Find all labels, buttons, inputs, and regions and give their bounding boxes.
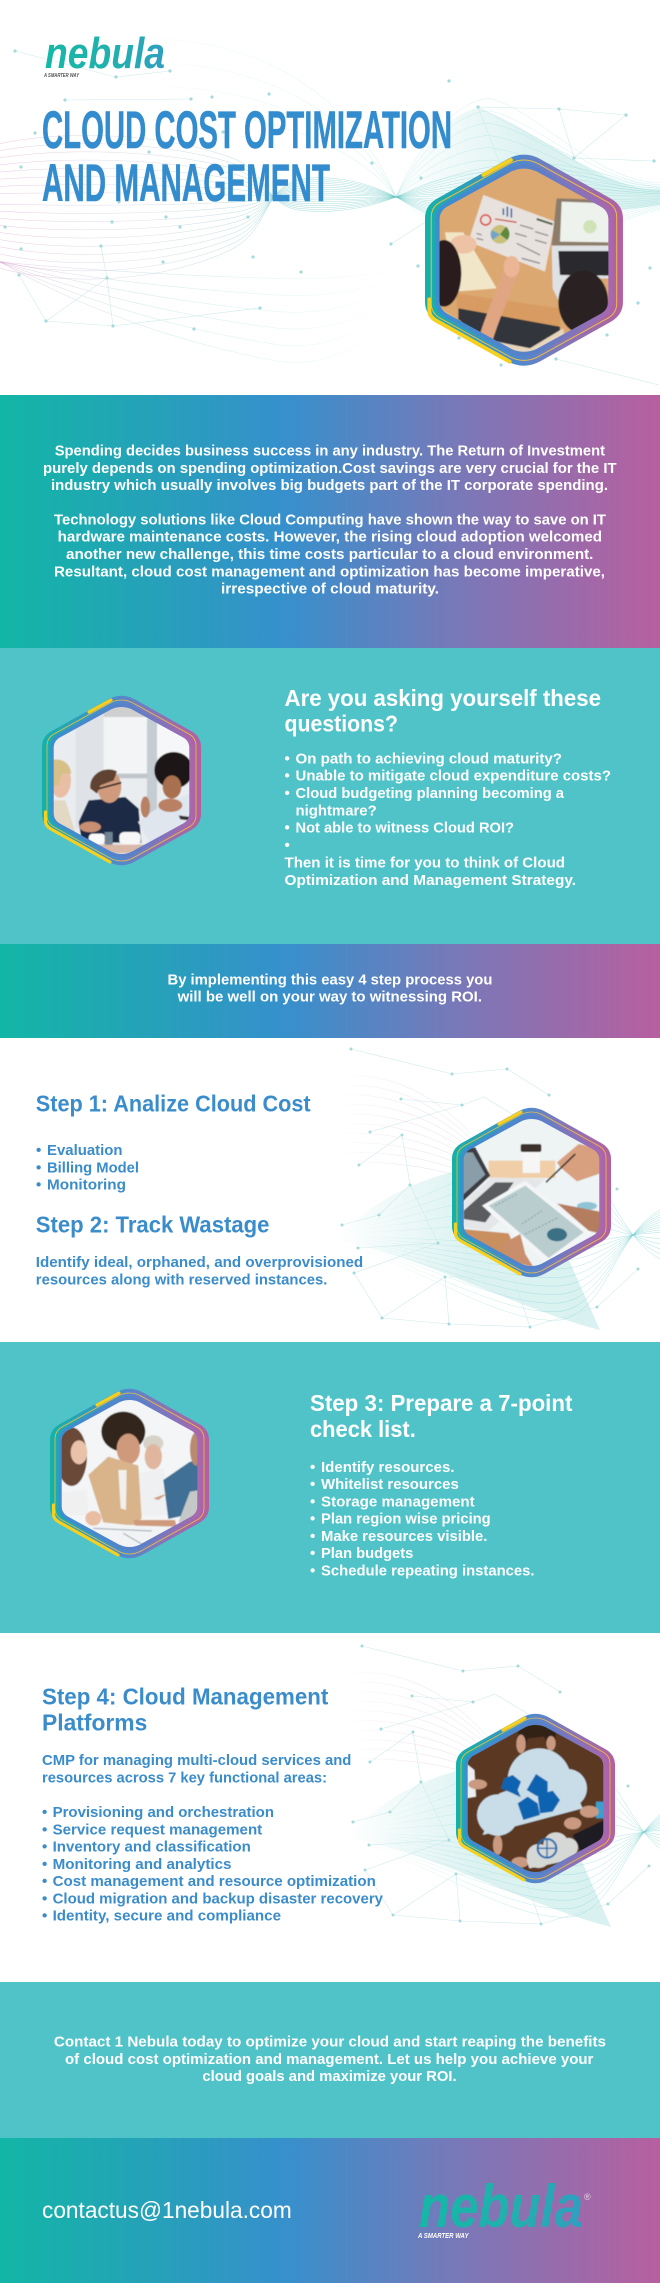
intro paragraph 2: Technology solutions like Cloud Computing have shown the way to save on IT — [54, 511, 606, 528]
functional areas list: • — [42, 1908, 47, 1925]
heading: step 1: Step 1: Analize Cloud Cost — [36, 1091, 311, 1117]
question list: Unable to mitigate cloud expenditure costs? — [296, 768, 611, 785]
functional areas list: Provisioning and orchestration — [53, 1804, 274, 1821]
functional areas list: • — [42, 1873, 47, 1890]
question list: • — [284, 750, 290, 767]
question list: • — [284, 837, 290, 854]
step 3 check list: • — [310, 1528, 315, 1545]
functional areas list: Monitoring and analytics — [53, 1856, 231, 1873]
question list: nightmare? — [296, 803, 377, 820]
panel: intro gradient band — [0, 395, 660, 648]
question list — [284, 750, 611, 854]
heading: are you asking — [284, 685, 601, 737]
step 1 list — [36, 1142, 139, 1194]
logo: nebula: A SMARTER WAY — [43, 73, 80, 79]
panel: four step banner: By implementing this easy 4 step process you — [168, 971, 492, 988]
intro paragraph 2: hardware maintenance costs. However, the rising cloud adoption welcomed — [58, 529, 602, 546]
logo: nebula: nebula — [45, 29, 165, 78]
heading: are you asking: questions? — [284, 711, 398, 737]
step 3 check list: • — [310, 1493, 315, 1510]
heading: step 2: Step 2: Track Wastage — [36, 1211, 269, 1237]
hexagon photo: meeting of three people — [42, 696, 201, 866]
panel: contact call to action: of cloud cost optimization and management. Let us help you achieve your — [65, 2051, 594, 2068]
CMP description: resources across 7 key functional areas: — [42, 1769, 327, 1786]
step 3 check list: Plan region wise pricing — [321, 1511, 491, 1528]
step 1 list: • — [36, 1142, 41, 1159]
heading: step 4: Step 4: Cloud Management — [42, 1683, 329, 1709]
panel: hero — [0, 29, 660, 385]
functional areas list: • — [42, 1856, 47, 1873]
hexagon photo: tablet and laptop — [452, 1108, 611, 1278]
footer logo: nebula — [419, 2173, 583, 2240]
then-it-is-time text: Then it is time for you to think of Cloud — [284, 854, 565, 871]
wave and network background — [330, 1048, 660, 1330]
heading: step 4 — [42, 1683, 329, 1735]
step 1 list: Monitoring — [47, 1177, 126, 1194]
step 2 description — [36, 1254, 363, 1288]
step 1 list: • — [36, 1159, 41, 1176]
step 3 check list: • — [310, 1545, 315, 1562]
panel: contact call to action — [0, 1982, 660, 2138]
hexagon photo: cloud and puzzle — [456, 1714, 615, 1884]
panel: steps 1 and 2 — [36, 1048, 660, 1330]
step 3 check list: Make resources visible. — [321, 1528, 487, 1545]
panel: contact call to action: cloud goals and maximize your ROI. — [202, 2068, 457, 2085]
step 3 check list — [310, 1459, 534, 1579]
functional areas list: • — [42, 1804, 47, 1821]
step 3 check list: • — [310, 1459, 315, 1476]
heading: step 3: check list. — [310, 1416, 416, 1442]
hero wave and network background — [0, 39, 660, 385]
functional areas list: • — [42, 1890, 47, 1907]
step 3 check list: Plan budgets — [321, 1545, 413, 1562]
step 2 description: resources along with reserved instances. — [36, 1271, 327, 1288]
panel: step 4 — [42, 1644, 660, 1927]
intro paragraph 2: irrespective of cloud maturity. — [221, 580, 439, 597]
then-it-is-time text: Optimization and Management Strategy. — [284, 872, 576, 889]
question list: • — [284, 785, 290, 802]
wave and network background — [341, 1644, 660, 1927]
step 3 check list: Schedule repeating instances. — [321, 1562, 534, 1579]
panel: footer — [0, 2138, 660, 2283]
step 3 check list: • — [310, 1511, 315, 1528]
step 1 list: Evaluation — [47, 1142, 122, 1159]
heading: are you asking: Are you asking yourself these — [284, 685, 601, 711]
step 3 check list: Whitelist resources — [321, 1476, 459, 1493]
step 3 check list: Storage management — [321, 1493, 475, 1510]
step 1 list: Billing Model — [47, 1159, 139, 1176]
question list: Cloud budgeting planning becoming a — [296, 785, 565, 802]
hexagon photo: team at laptop — [50, 1388, 209, 1558]
intro paragraph 1: purely depends on spending optimization.Cost savings are very crucial for the IT — [43, 460, 617, 477]
question list: • — [284, 820, 290, 837]
functional areas list — [42, 1804, 384, 1925]
functional areas list: Identity, secure and compliance — [53, 1908, 281, 1925]
functional areas list: Cost management and resource optimization — [53, 1873, 376, 1890]
panel: four step banner — [0, 944, 660, 1038]
hexagon photo: team reviewing charts — [425, 154, 623, 366]
intro paragraph 2 — [54, 511, 606, 597]
question list: • — [284, 768, 290, 785]
functional areas list: Cloud migration and backup disaster recovery — [53, 1890, 384, 1907]
step 1 list: • — [36, 1177, 41, 1194]
heading: step 4: Platforms — [42, 1709, 147, 1735]
contact email: contactus@1nebula.com — [42, 2197, 292, 2223]
question list: On path to achieving cloud maturity? — [296, 750, 562, 767]
title — [42, 101, 452, 213]
panel: contact call to action: Contact 1 Nebula today to optimize your cloud and start reaping the benefits — [54, 2034, 606, 2051]
panel: step 3 — [0, 1342, 660, 1633]
footer logo: A SMARTER WAY — [417, 2233, 470, 2240]
question list: Not able to witness Cloud ROI? — [296, 820, 514, 837]
intro paragraph 2: Resultant, cloud cost management and optimization has become imperative, — [54, 563, 605, 580]
footer logo: ® — [584, 2192, 591, 2202]
intro paragraph 1: industry which usually involves big budgets part of the IT corporate spending. — [51, 477, 608, 494]
intro paragraph 1: Spending decides business success in any industry. The Return of Investment — [55, 443, 605, 460]
panel: four step banner: will be well on your way to witnessing ROI. — [177, 989, 482, 1006]
CMP description — [42, 1752, 351, 1786]
then-it-is-time text — [284, 854, 576, 889]
intro paragraph 1 — [43, 443, 617, 494]
heading: step 3 — [310, 1390, 573, 1442]
step 3 check list: • — [310, 1562, 315, 1579]
step 3 check list: Identify resources. — [321, 1459, 454, 1476]
heading: step 3: Step 3: Prepare a 7-point — [310, 1390, 573, 1416]
title: AND MANAGEMENT — [42, 154, 330, 213]
functional areas list: Service request management — [53, 1821, 262, 1838]
CMP description: CMP for managing multi-cloud services and — [42, 1752, 351, 1769]
panel: questions — [0, 648, 660, 944]
step 3 check list: • — [310, 1476, 315, 1493]
intro paragraph 2: another new challenge, this time costs particular to a cloud environment. — [66, 546, 593, 563]
functional areas list: Inventory and classification — [53, 1839, 251, 1856]
functional areas list: • — [42, 1839, 47, 1856]
step 2 description: Identify ideal, orphaned, and overprovisioned — [36, 1254, 363, 1271]
functional areas list: • — [42, 1821, 47, 1838]
